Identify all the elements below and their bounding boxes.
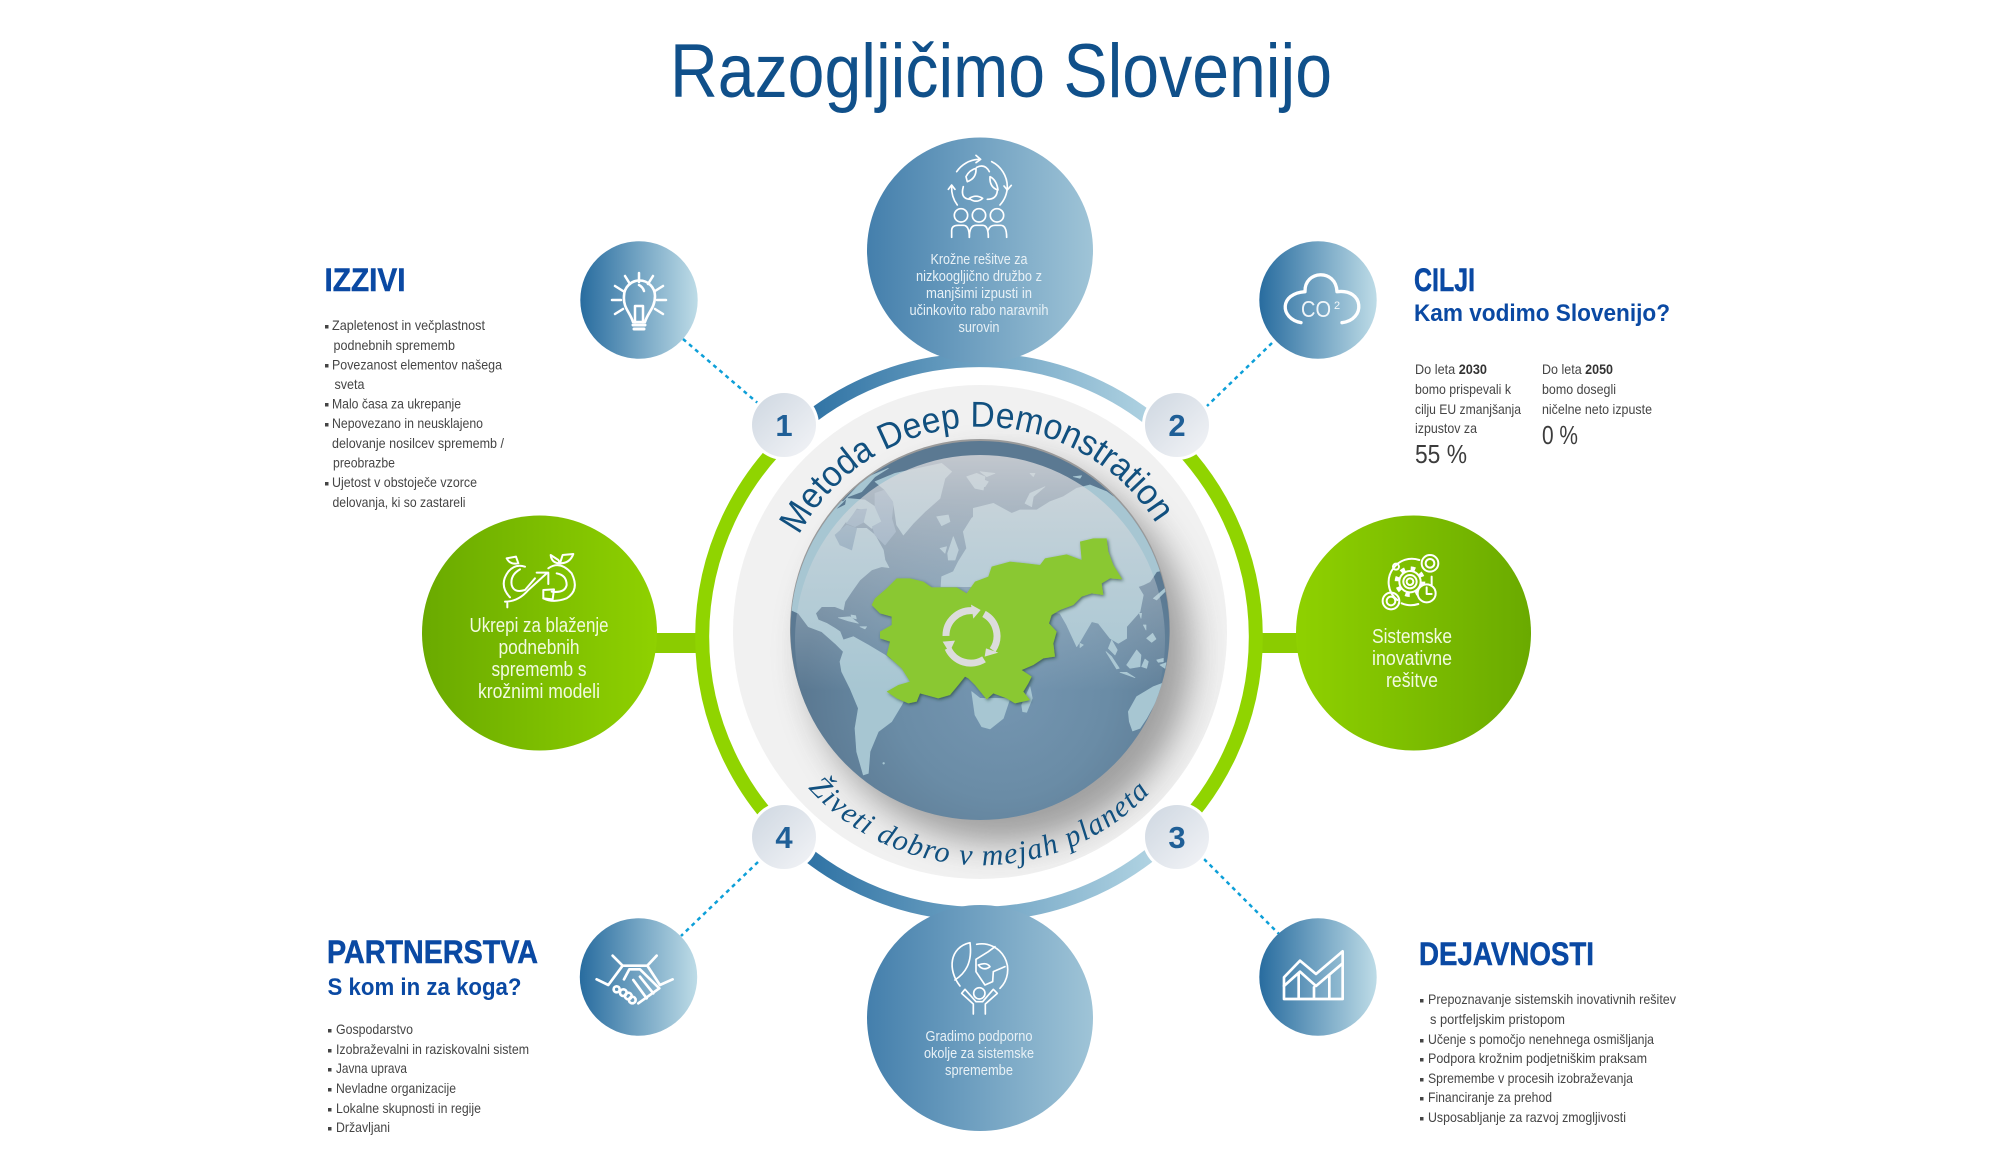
circle text: spremembe (945, 1063, 1013, 1079)
number badge 1 (749, 390, 819, 460)
goal 2030: 55 % (1415, 439, 1467, 469)
list: Malo časa za ukrepanje (332, 396, 461, 412)
icon: CO2 cloud (1259, 241, 1377, 359)
goal 2050: bomo dosegli (1542, 381, 1616, 397)
heading: IZZIVI (324, 262, 406, 298)
panel: PARTNERSTVA (327, 934, 538, 1135)
circle text: nizkoogljično družbo z (916, 269, 1042, 285)
icon: gears and clock (1383, 555, 1438, 609)
list: Usposabljanje za razvoj zmogljivosti (1428, 1109, 1626, 1125)
goal 2050: 0 % (1542, 420, 1578, 450)
number badge 2: 2 (1168, 408, 1186, 443)
list: Financiranje za prehod (1428, 1089, 1552, 1105)
panel: DEJAVNOSTI (1419, 936, 1676, 1125)
goal 2030: cilju EU zmanjšanja (1415, 401, 1521, 417)
icon: infinity with apples (504, 554, 575, 607)
heading: PARTNERSTVA (327, 934, 538, 970)
continents east (972, 472, 1173, 731)
circle text: manjšimi izpusti in (926, 286, 1032, 302)
circle text: inovativne (1372, 648, 1452, 670)
list (1420, 991, 1676, 1125)
title: Razogljičimo Slovenijo (670, 29, 1332, 114)
goal 2050: ničelne neto izpuste (1542, 401, 1652, 417)
number badge 4 (749, 802, 819, 872)
circle text: sprememb s (492, 659, 586, 681)
circle text: rešitve (1386, 670, 1438, 692)
circle text: krožnimi modeli (478, 681, 600, 703)
curved heading: Metoda Deep Demonstration: Metoda Deep Demonstration (779, 402, 1170, 533)
number badge 3 (1142, 802, 1212, 872)
list: Državljani (336, 1119, 390, 1135)
list: Povezanost elementov našega (332, 356, 502, 372)
list (328, 1021, 529, 1135)
list: Spremembe v procesih izobraževanja (1428, 1070, 1633, 1086)
list: Učenje s pomočjo nenehnega osmišljanja (1428, 1031, 1654, 1047)
map of Slovenia (872, 538, 1122, 703)
number badge 2 (1142, 390, 1212, 460)
list: preobrazbe (333, 454, 395, 470)
continents west (785, 463, 985, 775)
globe shadow (808, 460, 1192, 844)
heading: CILJI (1414, 262, 1475, 298)
circle text: Gradimo podporno (926, 1029, 1032, 1045)
panel: left green circle (422, 516, 657, 750)
subheading: S kom in za koga? (328, 974, 522, 1001)
list: delovanje nosilcev sprememb / (332, 435, 504, 451)
circle text: Krožne rešitve za (930, 252, 1028, 268)
icon: rising chart (1259, 918, 1377, 1036)
connector lines (681, 339, 1279, 936)
list: Ujetost v obstoječe vzorce (332, 474, 477, 490)
circle text (910, 252, 1048, 336)
goal 2050: Do leta 2050 (1542, 361, 1613, 377)
number badge 4: 4 (775, 820, 793, 855)
list: podnebnih sprememb (334, 337, 455, 353)
panel: IZZIVI (324, 262, 504, 510)
list: Podpora krožnim podjetniškim praksam (1428, 1050, 1647, 1066)
icon: CO2 cloud: 2 (1334, 300, 1340, 312)
circle text: okolje za sistemske (924, 1046, 1034, 1062)
list (325, 317, 504, 510)
list: s portfeljskim pristopom (1430, 1011, 1565, 1027)
goal 2030: bomo prispevali k (1415, 381, 1512, 397)
list: Javna uprava (336, 1060, 407, 1076)
circle text (924, 1029, 1034, 1079)
circle text (1372, 626, 1452, 692)
circle text: surovin (958, 320, 1000, 336)
icon: light bulb (580, 241, 698, 359)
connector bars (650, 633, 1304, 653)
list: Nepovezano in neusklajeno (332, 415, 483, 431)
circle text: podnebnih (498, 637, 580, 659)
panel: bottom circle (867, 905, 1093, 1131)
curved slogan: Živeti dobro v mejah planeta: Živeti dobro v mejah planeta (808, 775, 1149, 868)
panel: right green circle (1296, 516, 1531, 750)
goal 2030 (1415, 361, 1521, 469)
list: Prepoznavanje sistemskih inovativnih rešitev (1428, 991, 1676, 1007)
circle text: Sistemske (1372, 626, 1452, 648)
icon: globe with leaf and person (952, 943, 1008, 1014)
circle text: Ukrepi za blaženje (470, 615, 608, 637)
subheading: Kam vodimo Slovenijo? (1414, 300, 1670, 327)
panel: CILJI (1414, 262, 1670, 469)
list: sveta (334, 376, 365, 392)
list: Lokalne skupnosti in regije (336, 1100, 481, 1116)
circle text (470, 615, 608, 703)
globe (785, 440, 1173, 825)
goal 2030: izpustov za (1415, 420, 1477, 436)
icon: circular economy people (948, 155, 1011, 237)
icon: handshake (580, 918, 697, 1036)
icon: CO2 cloud: CO (1301, 296, 1331, 322)
list: Zapletenost in večplastnost (332, 317, 485, 333)
outer ring (702, 360, 1256, 914)
icon: recycle arrows (943, 605, 998, 663)
list: Nevladne organizacije (336, 1080, 456, 1096)
panel: top circle (867, 138, 1093, 364)
central disc with globe (733, 385, 1227, 879)
circle text: učinkovito rabo naravnih (910, 303, 1048, 319)
heading: DEJAVNOSTI (1419, 936, 1594, 972)
goal 2030: Do leta 2030 (1415, 361, 1487, 377)
list: Gospodarstvo (336, 1021, 413, 1037)
list: delovanja, ki so zastareli (332, 494, 466, 510)
list: Izobraževalni in raziskovalni sistem (336, 1041, 529, 1057)
goal 2050 (1542, 361, 1652, 450)
number badge 3: 3 (1168, 820, 1186, 855)
number badge 1: 1 (775, 408, 793, 443)
